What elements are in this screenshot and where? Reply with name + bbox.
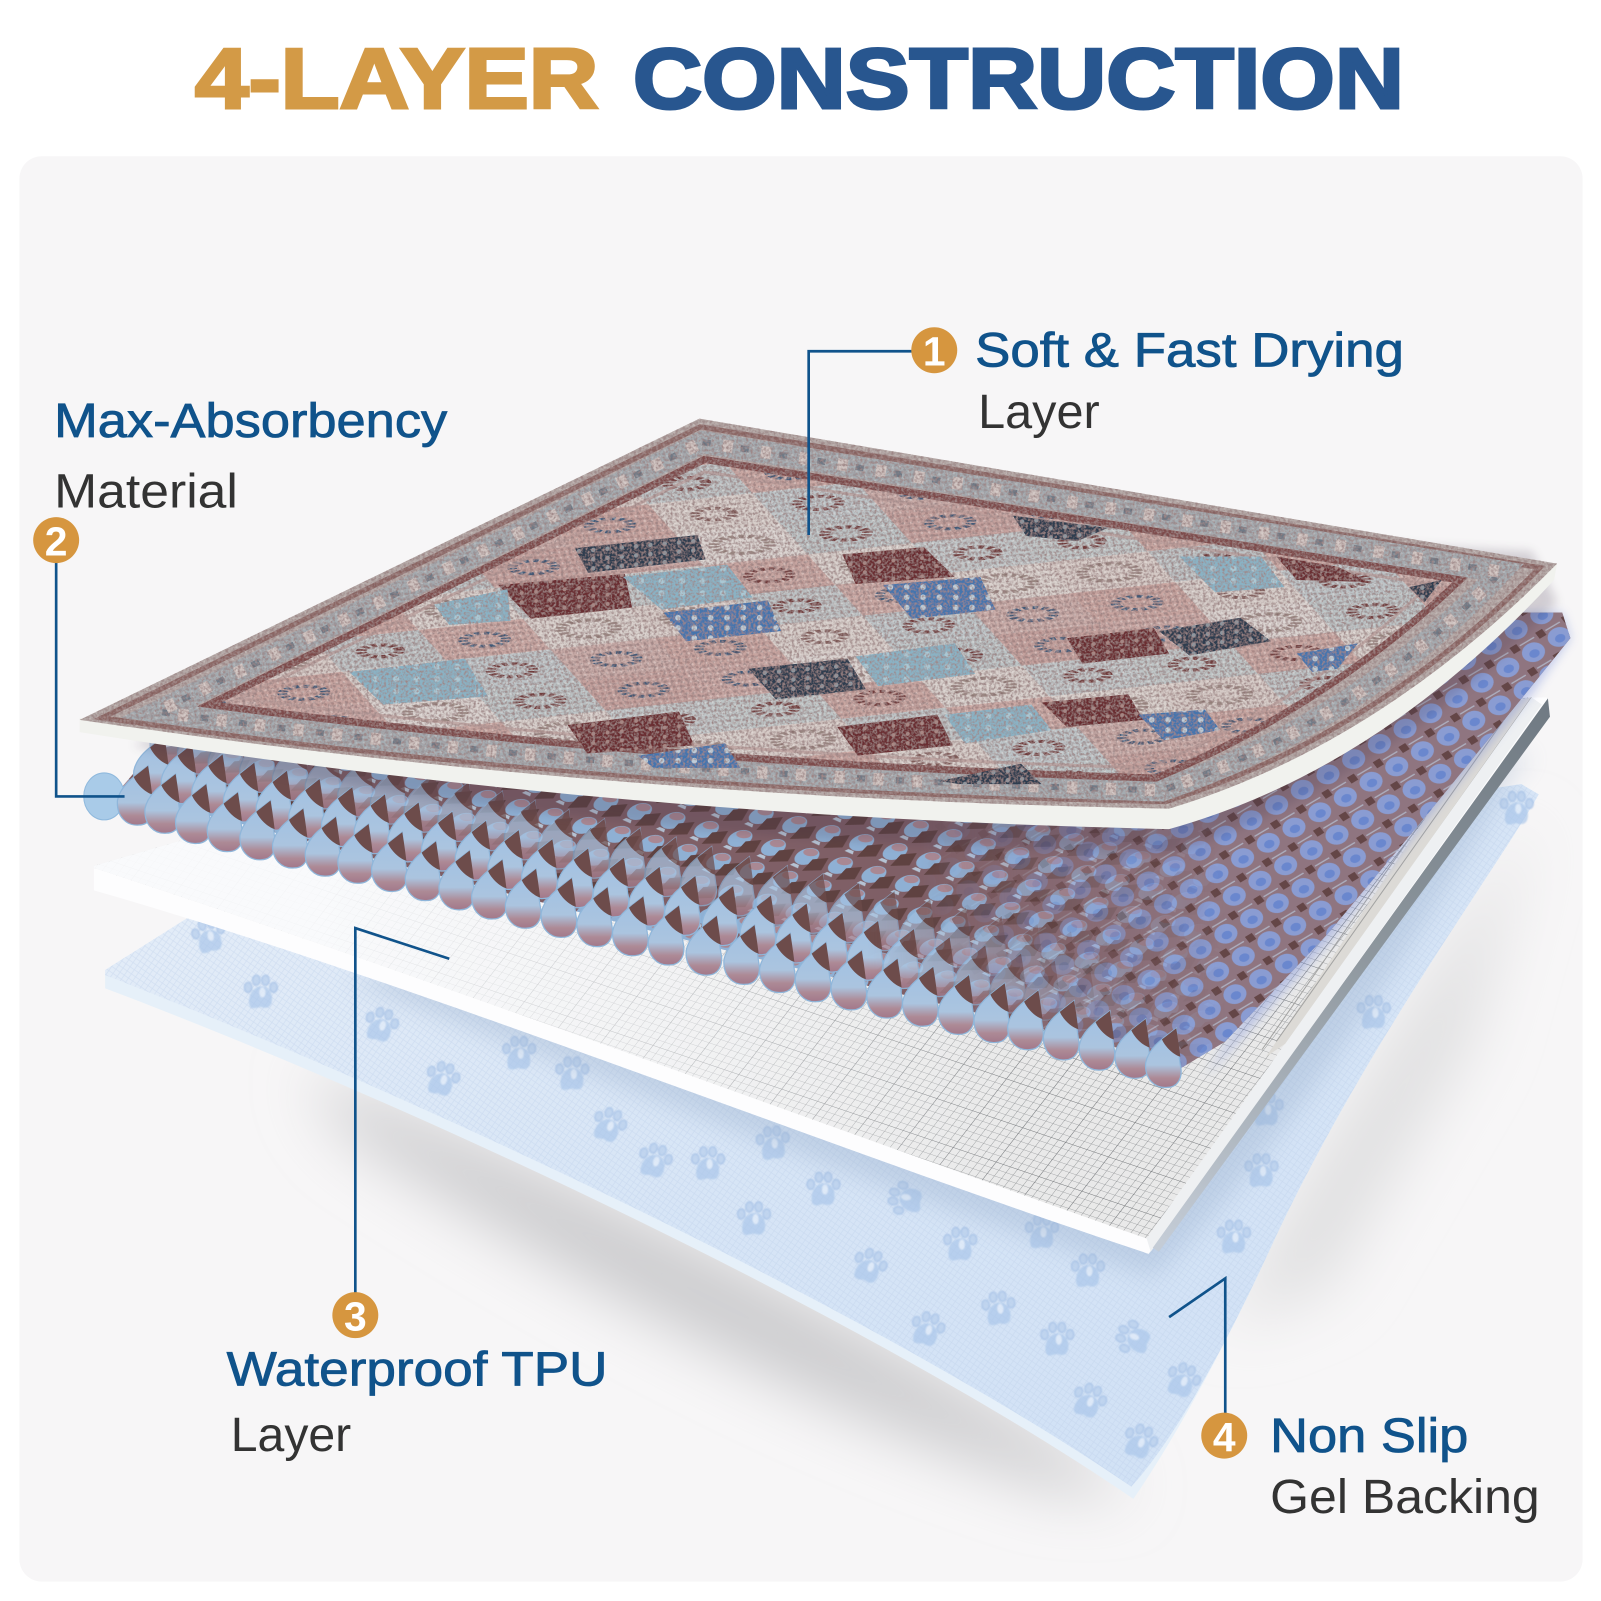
badge 2: 2 (45, 518, 68, 564)
layer 3: waterproof TPU (94, 697, 1550, 1254)
label 3: Waterproof TPU (227, 1344, 608, 1397)
back rows of bubble drops (133, 742, 1128, 1031)
accent tiles (349, 516, 1442, 784)
title (195, 31, 1404, 127)
layer stack illustration (80, 419, 1570, 1499)
label 2: Max-Absorbency (54, 395, 447, 448)
badge 4: 4 (1213, 1414, 1236, 1460)
label 4 (1270, 1410, 1540, 1524)
badge 1 (911, 327, 957, 375)
badge 3 (332, 1292, 378, 1339)
label 1: Soft & Fast Drying (975, 325, 1404, 378)
layer 2: max-absorbency bubbles (84, 613, 1570, 1087)
shadow of rug on bubbles (133, 511, 1557, 853)
label 2: Material (54, 465, 238, 518)
badge 3: 3 (344, 1293, 367, 1339)
shadow of layer 3 on layer 4 (347, 756, 1532, 1276)
label 1 (975, 325, 1404, 439)
label 1: Layer (978, 386, 1100, 439)
paw prints (190, 792, 1533, 1463)
rug surface (80, 419, 1557, 809)
badge 2 (33, 517, 79, 564)
callout: layer 1 (809, 325, 1404, 535)
callout: layer 2 (33, 395, 447, 796)
leader line 4 (1169, 1278, 1225, 1414)
label 4: Gel Backing (1270, 1471, 1540, 1524)
layer 1: rug top (80, 419, 1557, 829)
rug edge thickness (80, 564, 1557, 829)
label 3: Layer (231, 1409, 351, 1462)
leader line 2 (56, 562, 125, 796)
leader line 1 (809, 351, 912, 535)
callout: layer 4 (1169, 1278, 1540, 1524)
label 2 (54, 395, 447, 518)
label 3 (227, 1344, 608, 1462)
right band with long lines (1266, 697, 1532, 1057)
badge 4 (1201, 1413, 1247, 1460)
bubble drops along front edge (117, 766, 1181, 1087)
badge 1: 1 (923, 329, 946, 375)
title: 4-LAYER (195, 31, 598, 127)
floor shadow (306, 817, 1532, 1491)
leader line 3 (355, 928, 449, 1295)
callout: layer 3 (227, 928, 608, 1462)
title: CONSTRUCTION (633, 31, 1404, 127)
layer 4: non slip gel backing (105, 784, 1539, 1499)
label 4: Non Slip (1270, 1410, 1468, 1463)
